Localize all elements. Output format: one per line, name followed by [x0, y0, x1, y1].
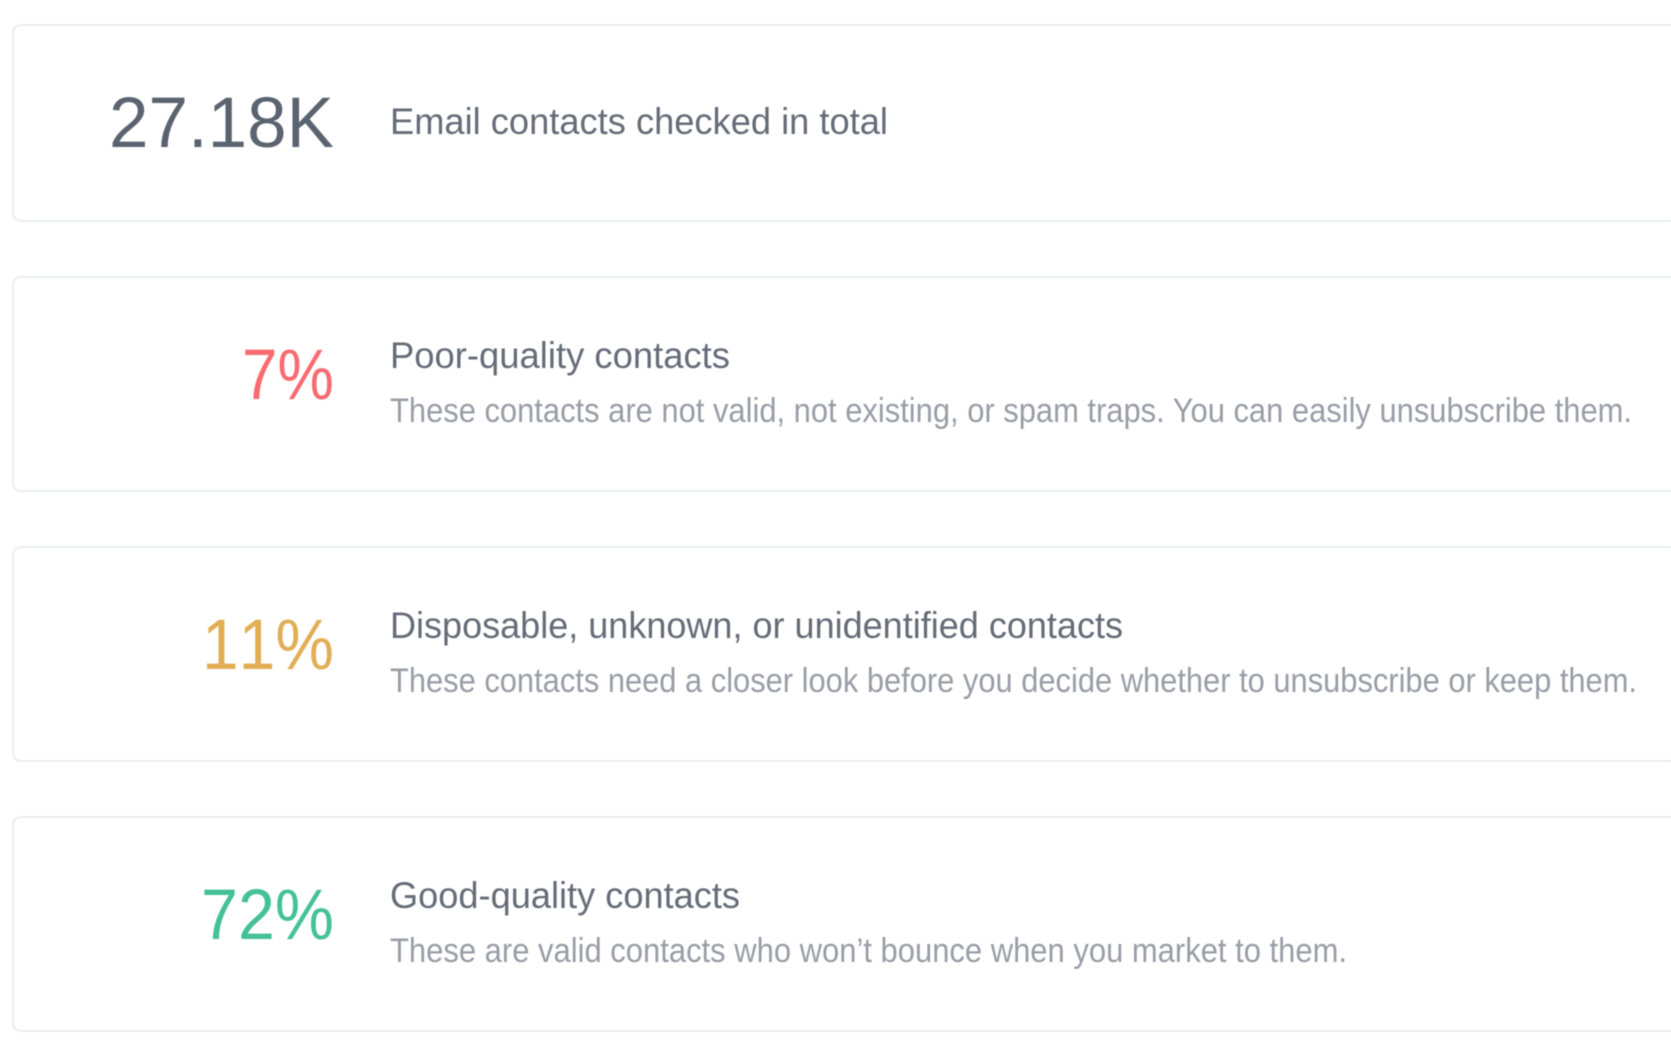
- panel: total contacts: [13, 25, 1671, 221]
- card outline: total: [13, 25, 1671, 221]
- card outline: poor quality: [13, 277, 1671, 491]
- big number: 27.18K: 27.18K: [109, 84, 334, 163]
- panel: disposable or unknown contacts: [13, 547, 1671, 761]
- big number: 11%: 11%: [202, 606, 334, 685]
- card outline: disposable: [13, 547, 1671, 761]
- heading: good quality: Good-quality contacts: [390, 875, 740, 916]
- card outline: good quality: [13, 817, 1671, 1031]
- panel: poor-quality contacts: [13, 277, 1671, 491]
- heading: disposable: Disposable, unknown, or unidentified contacts: [390, 605, 1123, 646]
- panel: good-quality contacts: [13, 817, 1671, 1031]
- big number: 72%: 72%: [201, 876, 334, 955]
- heading: poor quality: Poor-quality contacts: [390, 335, 730, 376]
- heading: total contacts: Email contacts checked in total: [390, 101, 888, 142]
- description: good quality: These are valid contacts who won’t bounce when you market to them.: [390, 932, 1347, 970]
- big number: 7%: 7%: [242, 336, 334, 415]
